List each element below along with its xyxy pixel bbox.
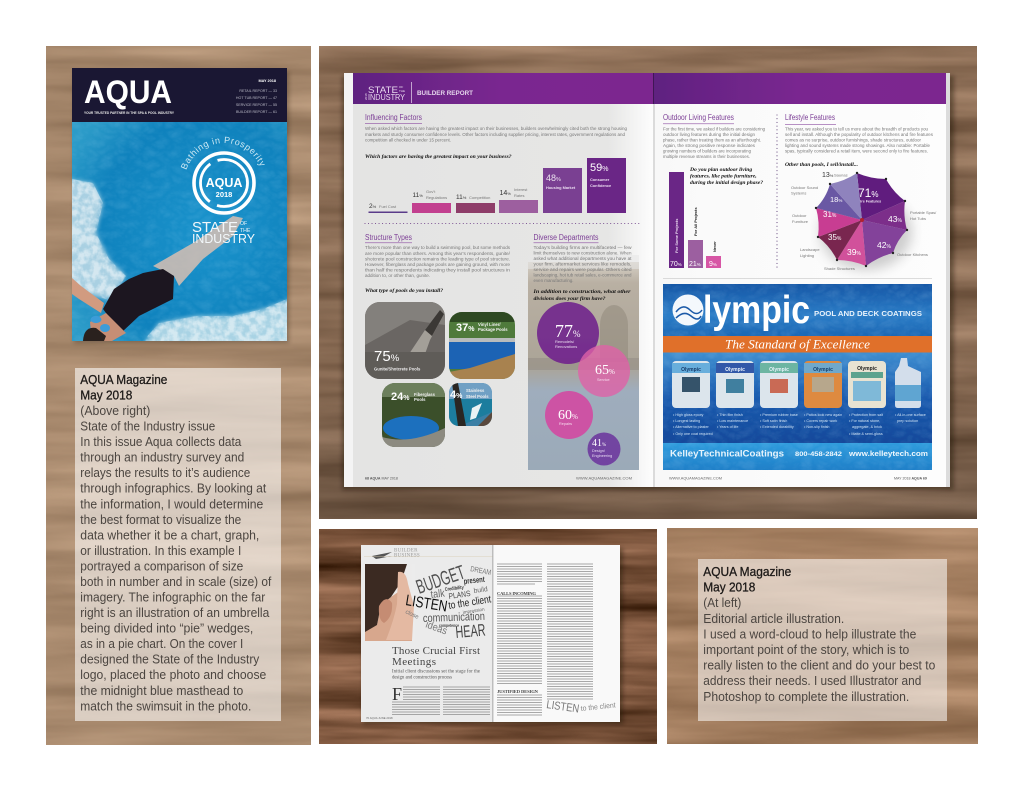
department header: BUSINESS [394, 554, 420, 558]
text box: cover description: or illustration. In this example I [80, 544, 241, 558]
bar: For All Projects 21% [688, 207, 703, 268]
word cloud [404, 562, 492, 642]
photo tile: Fiberglass Pools 24% [382, 383, 445, 447]
article body text [392, 684, 490, 714]
bar: Interest Rates 14% [499, 187, 538, 213]
report header band: STATE [368, 85, 398, 96]
section: Diverse Departments with photo: divisions does your firm have? [534, 296, 606, 302]
text box: editorial description [698, 559, 947, 721]
wedge: Outdoor Sound Systems 18%: Systems [791, 190, 806, 196]
article body columns [497, 564, 593, 715]
word cloud: ideas [424, 619, 449, 637]
bar: For Some Projects 70%: 70% [670, 261, 682, 268]
text box: cover description [75, 368, 281, 721]
word cloud: build [473, 586, 488, 595]
text box: cover description: portrayed a comparison of size [80, 559, 243, 573]
text box: editorial description: really listen to the client and do your best to [703, 659, 935, 673]
bar: For Some Projects 70% [669, 172, 684, 268]
text box: cover description: data whether it be a chart, graph, [80, 528, 259, 542]
bar: Consumer Confidence 59%: Consumer [590, 177, 610, 182]
can 1: Deckoat: • Only one coat required [673, 432, 713, 436]
article body columns: CALLS INCOMING [497, 591, 536, 596]
can 5: Masonry Sealer: • Matte & semi-gloss [849, 432, 883, 436]
section: Diverse Departments with photo: even manufacturing. [534, 278, 574, 283]
text box: editorial description: Editorial article illustration. [703, 612, 844, 626]
section: Diverse Departments with photo: landscaping, hot tub retail sales, e-commerce and [534, 272, 632, 278]
advertiser contact line: KelleyTechnicalCoatings [670, 448, 784, 460]
photo tile: Vinyl Liner/Package Pools 37%: Vinyl Liner/ [478, 322, 501, 327]
panel: Builder Report magazine spread on wood [319, 46, 977, 519]
can 4: Patio Stone: • Covers repair work [804, 419, 837, 423]
section: Lifestyle Features: Other than pools, I sell/install... [785, 162, 858, 168]
wedge: Portable Spas/Hot Tubs 43%: Portable Spas/ [910, 210, 937, 215]
cover masthead: RETAIL REPORT — 33 [239, 89, 277, 93]
wedge: Shade Structures 39% [824, 220, 866, 271]
section: Influencing Factors [365, 112, 628, 160]
can 5: Masonry Sealer: • For natural stone, [849, 419, 880, 423]
article left page: 70 AQUA JUNE 2018 [366, 716, 393, 720]
can 4: Patio Stone: • Patios look new again [804, 413, 842, 417]
section: Diverse Departments with photo [528, 232, 639, 470]
can 4: Patio Stone: Olympic [813, 367, 833, 373]
section: Diverse Departments with photo: Today’s building firms are multifaceted — few [534, 245, 633, 250]
photo tile: Gunite/Shotcrete Pools 75% [365, 302, 445, 379]
orange tagline band [663, 336, 932, 352]
bubble: Design/Engineering 41% [588, 432, 620, 466]
text box: cover description: the midnight blue masthead to [80, 684, 243, 698]
section: Influencing Factors: When asked which factors are having the greatest impact on their businesses, builders overwhelmingly cited both the strong housing [365, 126, 628, 131]
report header band: THE [399, 89, 405, 93]
can 1: Deckoat: Olympic [681, 367, 701, 373]
bar: Housing Market 48% [543, 168, 582, 213]
can 4: Patio Stone: • Non-slip finish [804, 425, 829, 429]
word cloud: talk [430, 588, 446, 601]
photo tile: Stainless Steel Pools 4%: Steel Pools [466, 394, 489, 399]
wedge: Fire Features 71%: 71% [858, 186, 878, 200]
section: Diverse Departments with photo: In addition to construction, what other [532, 289, 631, 295]
photo tile: Stainless Steel Pools 4%: 4% [450, 389, 463, 401]
bubble: Service 65%: Service [597, 378, 610, 382]
State of the Industry logo: 2018 [216, 190, 232, 199]
bar chart: influencing factors [368, 158, 626, 213]
section: Outdoor Living Features: Outdoor Living Features [663, 112, 734, 122]
pull text: LISTEN to the client [546, 699, 617, 716]
bar: Competition 11% [456, 194, 495, 213]
bottle: surface prep: • All-in-one surface [895, 413, 926, 417]
text box: editorial description: important point of the story, which is to [703, 643, 909, 657]
article title: Initial client discussions set the stage for the [392, 670, 480, 674]
Olympic logo: lympic [703, 289, 810, 332]
left page footer: WWW.AQUAMAGAZINE.COM [576, 476, 632, 480]
photo tile: Stainless Steel Pools 4% [449, 383, 492, 426]
text box: cover description: the best format to visualize the [80, 513, 241, 527]
right magazine page [653, 73, 950, 487]
section: Outdoor Living Features: Do you plan outdoor living [689, 167, 752, 173]
word cloud: PLANS [448, 589, 471, 601]
article title: design and construction process [392, 676, 452, 680]
text box: cover description: (Above right) [80, 404, 150, 418]
wedge: Saunas 13%: 13% [822, 172, 834, 179]
Olympic logo: POOL AND DECK COATINGS [814, 311, 922, 318]
section: Lifestyle Features: Lifestyle Features [785, 112, 835, 122]
section: Outdoor Living Features: For the first time, we asked if builders are considering [663, 126, 766, 132]
cover masthead: AQUA [84, 74, 172, 110]
wedge: Shade Structures 39%: Shade Structures [824, 266, 855, 271]
photo tile: Vinyl Liner/Package Pools 37% [449, 312, 515, 379]
report header band: OF [399, 85, 403, 89]
word cloud: communication [423, 611, 485, 625]
article title: Those Crucial First [392, 645, 480, 657]
section: Structure Types: are more popular than others. Among this year’s respondents, gunite/ [365, 251, 511, 256]
can 5: Masonry Sealer: Olympic [857, 366, 877, 372]
article title: Meetings [392, 656, 436, 668]
bar: Never 9%: Never [712, 241, 717, 252]
section: Lifestyle Features: comes as no surprise, outdoor furnishings, shade structures, outdoor [785, 138, 922, 142]
panel: editorial description on wood [667, 528, 978, 744]
bottle: surface prep: prep solution [897, 419, 918, 423]
cover masthead: SERVICE REPORT — 55 [236, 103, 277, 107]
section: Outdoor Living Features: during the initial design phase? [690, 180, 763, 186]
wedge: Saunas 13% [822, 172, 862, 220]
wedge: Portable Spas/Hot Tubs 43%: Hot Tubs [910, 216, 926, 221]
can 1: Deckoat: • Longest lasting [673, 419, 700, 423]
bar: Fuel Cost 2%: Fuel Cost [379, 204, 397, 209]
bar: Competition 11%: 11% [456, 194, 467, 201]
panel: cover and description on wood [46, 46, 311, 745]
article body columns: JUSTIFIED DESIGN [497, 689, 539, 694]
right page footer: MAY 2018 AQUA 69 [894, 476, 927, 480]
article body text: F [392, 684, 402, 704]
bar: Interest Rates 14%: 14% [500, 190, 511, 197]
wedge: Landscape Lighting 35%: 35% [828, 233, 842, 242]
text box: cover description: AQUA Magazine [80, 373, 167, 387]
department header [364, 548, 493, 559]
cover masthead [72, 68, 287, 122]
bar: For All Projects 21%: For All Projects [693, 207, 698, 236]
cover photo: swimmer in pool [68, 122, 291, 345]
section: Diverse Departments with photo: your firm, aftermarket services like remodels, [534, 262, 632, 266]
can 3: Poxolon 2: • Soft satin finish [760, 419, 787, 423]
word cloud: close [404, 609, 420, 621]
State of the Industry logo: Bathing in Prosperity [180, 136, 265, 170]
section: Outdoor Living Features: outdoor living features during the initial design [663, 132, 756, 137]
bar: Housing Market 48%: Housing Market [546, 185, 576, 190]
orange tagline band: The Standard of Excellence [725, 338, 870, 352]
can 2: Poxolon 1 [716, 361, 754, 429]
word cloud: Credibility [445, 585, 464, 593]
wedge: Outdoor Furniture 31%: Outdoor [792, 213, 807, 218]
section: Structure Types [365, 232, 511, 294]
photo tile: Gunite/Shotcrete Pools 75%: 75% [374, 348, 400, 365]
section: Influencing Factors: markets and sturdy consumer confidence levels. Other factors including supplier pricing, interest rates, government regulations and [365, 132, 626, 137]
section: Influencing Factors: Which factors are having the greatest impact on your business? [365, 154, 512, 160]
left page footer: 68 AQUA MAY 2018 [365, 476, 398, 480]
report header band: 2018 [364, 93, 368, 100]
wedge: Outdoor Kitchens 42%: 42% [877, 240, 891, 250]
section: Lifestyle Features: lighting and sound systems made strong showings. Also notable: Portable [785, 143, 931, 148]
bar: For Some Projects 70%: For Some Projects [674, 219, 679, 253]
word cloud: BUDGET [413, 562, 468, 599]
can 3: Poxolon 2: • Extended durability [760, 425, 794, 429]
cover masthead: BUILDER REPORT — 61 [236, 110, 277, 114]
can 2: Poxolon 1: Olympic [725, 367, 745, 373]
text box: cover description: being divided into “pie” wedges, [80, 622, 253, 636]
text box: cover description: relays the results to it’s audience [80, 466, 250, 480]
department header: BUILDER [394, 548, 418, 554]
section: Diverse Departments with photo: limit themselves to new construction alone. When [534, 250, 632, 256]
photo: ear and cupped hand [365, 564, 415, 641]
advertiser contact line: 800-458-2842 [795, 451, 842, 458]
section: Influencing Factors: Influencing Factors [365, 112, 422, 122]
bar: Never 9% [706, 241, 721, 268]
State of the Industry logo: STATE [192, 219, 238, 236]
advertiser contact line [670, 448, 928, 460]
report header band [353, 73, 653, 104]
bubble: Remodels/Renovations 77%: Renovations [555, 344, 577, 349]
report header band: BUILDER REPORT [417, 90, 473, 97]
left magazine page [344, 73, 653, 487]
Olympic logo [672, 289, 922, 332]
photo tile: Vinyl Liner/Package Pools 37%: 37% [456, 322, 475, 334]
text box: cover description: the information, I would determine [80, 497, 263, 511]
word cloud: DREAM [470, 564, 492, 577]
State of the Industry logo: OF [240, 221, 247, 227]
word cloud: impression [462, 607, 485, 616]
can 3: Poxolon 2 [760, 361, 798, 429]
article right page [492, 545, 620, 722]
can 3: Poxolon 2: • Premium rubber base [760, 413, 798, 417]
section: Structure Types: addition to, or other than, gunite. [365, 273, 430, 278]
photo tile: Stainless Steel Pools 4%: Stainless [466, 388, 485, 393]
can 1: Deckoat [672, 361, 713, 436]
right page footer [669, 476, 927, 480]
section: Structure Types: There’s more than one way to build a swimming pool, but some methods [365, 245, 510, 250]
section: Structure Types: However, fiberglass and package pools are gaining ground, with more [365, 262, 511, 267]
section: Structure Types: Structure Types [365, 232, 412, 242]
can 1: Deckoat: • Alternative to plaster [673, 425, 709, 429]
bar: Consumer Confidence 59%: 59% [590, 162, 608, 174]
section: Diverse Departments with photo: service and repairs were popular. Others cited [534, 267, 632, 272]
section: Outdoor Living Features: Again, the strong positive response indicates [663, 143, 755, 148]
wedge: Portable Spas/Hot Tubs 43% [862, 201, 937, 230]
bar: Gov't Regulations 11%: Regulations [426, 195, 447, 200]
text box: cover description: through an industry survey and [80, 451, 244, 465]
section: Structure Types: than half the respondents indicating they install pool structures in [365, 268, 511, 272]
text box: cover description: In this issue Aqua collects data [80, 435, 241, 449]
wedge: Outdoor Sound Systems 18% [791, 184, 862, 220]
bar: Fuel Cost 2%: 2% [369, 203, 377, 210]
product cans and feature lists [672, 358, 926, 436]
bubble: Service 65%: 65% [595, 363, 615, 378]
pull text: LISTEN to the client: to the client [580, 700, 617, 713]
bubble: Design/Engineering 41%: Design/ [592, 449, 606, 453]
can 3: Poxolon 2: Olympic [769, 367, 789, 373]
text box: cover description: match the swimsuit in the photo. [80, 699, 251, 713]
bar: Never 9%: 9% [709, 261, 717, 268]
photo tile: Gunite/Shotcrete Pools 75%: Gunite/Shotcrete Pools [374, 366, 421, 372]
bubble: Repairs 60%: 60% [558, 408, 578, 423]
article title [392, 645, 480, 680]
wedge: Outdoor Furniture 31% [792, 208, 862, 237]
cover masthead: HOT TUB REPORT — 47 [236, 96, 277, 100]
section: Outdoor Living Features: phase, rather than treating them as an afterthought. [663, 138, 761, 142]
can 5: Masonry Sealer [848, 361, 886, 436]
photo tile: Fiberglass Pools 24%: Fiberglass [414, 392, 436, 397]
word cloud: HEAR [455, 620, 486, 642]
text box: cover description: right is an illustration of an umbrella [80, 606, 269, 620]
advertisement: Olympic Pool and Deck Coatings [663, 284, 932, 470]
wedge: Outdoor Sound Systems 18%: 18% [830, 195, 842, 204]
wedge: Landscape Lighting 35% [800, 220, 862, 260]
bottle: surface prep [895, 358, 926, 423]
section: Influencing Factors: competition all checked in under 15 percent. [365, 138, 451, 142]
bubble: Design/Engineering 41%: Engineering [592, 454, 612, 458]
bar: For All Projects 21%: 21% [689, 261, 701, 268]
panel: editorial article spread on wood [319, 529, 657, 744]
text box: cover description: State of the Industry issue [80, 420, 215, 434]
section: Outdoor Living Features: features, like patio furniture, [690, 174, 757, 180]
State of the Industry logo: THE [240, 228, 251, 234]
header band [653, 73, 946, 104]
section: Outdoor Living Features [663, 112, 766, 186]
bubble: Design/Engineering 41%: 41% [592, 438, 606, 449]
text box: editorial description: (At left) [703, 596, 741, 610]
wedge: Outdoor Sound Systems 18%: Outdoor Sound [791, 185, 818, 190]
wedge: Outdoor Kitchens 42%: Outdoor Kitchens [897, 252, 928, 257]
wedge: Portable Spas/Hot Tubs 43%: 43% [888, 214, 902, 224]
left page footer [365, 476, 632, 480]
section: Lifestyle Features: spas, typically considered a retail item, were second only to fire features. [785, 148, 928, 154]
wedge: Shade Structures 39%: 39% [847, 247, 861, 257]
can 1: Deckoat: • High gloss epoxy [673, 413, 704, 417]
word cloud: LISTEN [404, 592, 449, 616]
text box: editorial description: I used a word-cloud to help illustrate the [703, 627, 916, 641]
section: Structure Types: What type of pools do you install? [365, 288, 443, 294]
cover masthead: YOUR TRUSTED PARTNER IN THE SPA & POOL INDUSTRY [84, 111, 174, 115]
text box: cover description: as in a pie chart. On the cover I [80, 637, 243, 651]
wedge: Fire Features 71% [857, 173, 905, 220]
umbrella pie chart: lifestyle features [791, 172, 937, 271]
bar: Gov't Regulations 11%: Gov’t [426, 189, 436, 194]
bar: Consumer Confidence 59% [587, 158, 626, 213]
article left page [361, 545, 493, 722]
wedge: Outdoor Furniture 31%: Furniture [792, 219, 809, 224]
section: Lifestyle Features [785, 112, 933, 168]
bubble: Remodels/Renovations 77% [537, 302, 599, 364]
can 2: Poxolon 1: • Years of life [717, 425, 738, 429]
can 5: Masonry Sealer: • Protection from salt [849, 413, 883, 417]
word cloud: competence [439, 623, 459, 628]
section: Outdoor Living Features: growing numbers of builders are incorporating [663, 148, 752, 154]
bar: Gov't Regulations 11% [412, 189, 451, 213]
section: Lifestyle Features: sell and install. Although the popularity of outdoor kitchens and fire features [785, 132, 933, 137]
section: Diverse Departments with photo: Diverse Departments [534, 232, 598, 242]
text box: cover description: logo, placed the photo and choose [80, 668, 266, 682]
text box: editorial description: AQUA Magazine [703, 565, 791, 579]
word cloud: to the client [448, 593, 492, 612]
bar: Interest Rates 14%: Interest [514, 187, 528, 192]
text box: editorial description: Photoshop to complete the illustration. [703, 690, 909, 704]
can 5: Masonry Sealer: aggregate, & brick [852, 425, 882, 429]
bubble: Repairs 60%: Repairs [559, 422, 572, 426]
text box: cover description: both in number and in scale (size) of [80, 575, 272, 589]
text box: cover description: through infographics. By looking at [80, 482, 267, 496]
pull text: LISTEN to the client: LISTEN [546, 699, 580, 716]
State of the Industry logo [180, 136, 265, 246]
wedge: Saunas 13%: Saunas [834, 172, 848, 178]
photo tile: Fiberglass Pools 24%: 24% [391, 391, 410, 403]
bar: Interest Rates 14%: Rates [514, 193, 524, 198]
text box: cover description: May 2018 [80, 388, 132, 402]
text box: cover description: designed the State of the Industry [80, 653, 260, 667]
State of the Industry logo: AQUA [206, 176, 242, 190]
bar: Housing Market 48%: 48% [546, 173, 561, 183]
bubble: Service 65% [578, 345, 630, 397]
bar chart: outdoor living [669, 172, 721, 268]
wedge: Outdoor Kitchens 42% [862, 220, 928, 266]
bar: Consumer Confidence 59%: Confidence [590, 183, 612, 188]
can 4: Patio Stone [804, 361, 842, 429]
section: Lifestyle Features: This year, we asked you to tell us more about the breadth of products you [785, 126, 929, 132]
section: Structure Types: shotcrete pool construction remains the leading type of pool structure. [365, 256, 510, 262]
cover masthead: MAY 2018 [258, 79, 276, 83]
section: Diverse Departments with photo: asked what additional departments you have at [534, 256, 632, 261]
State of the Industry logo: INDUSTRY [192, 231, 255, 246]
bar: Gov't Regulations 11%: 11% [412, 192, 423, 199]
report header band: INDUSTRY [368, 92, 405, 102]
can 2: Poxolon 1: • Thin film finish [717, 413, 743, 417]
bar: Fuel Cost 2% [368, 203, 408, 213]
section: Outdoor Living Features: multiple revenue streams in their businesses. [663, 154, 750, 159]
wedge: Fire Features 71%: Fire Features [858, 200, 881, 204]
text box: editorial description: May 2018 [703, 581, 755, 595]
wedge: Outdoor Furniture 31%: 31% [823, 210, 837, 219]
photo tile: Fiberglass Pools 24%: Pools [414, 397, 426, 402]
text box: editorial description: address their needs. I used Illustrator and [703, 674, 921, 688]
word cloud: present [463, 575, 485, 586]
photo tile: Vinyl Liner/Package Pools 37%: Package Pools [478, 327, 508, 332]
text box: cover description: imagery. The infographic on the far [80, 590, 265, 604]
bubble: Remodels/Renovations 77%: 77% [555, 321, 581, 341]
right page footer: WWW.AQUAMAGAZINE.COM [669, 476, 722, 480]
bubble: Repairs 60% [545, 391, 593, 439]
wedge: Landscape Lighting 35%: Lighting [800, 253, 814, 258]
can 2: Poxolon 1: • Low maintenance [717, 419, 748, 423]
magazine cover [72, 68, 287, 341]
bar: Competition 11%: Competition [469, 195, 490, 200]
bubble: Remodels/Renovations 77%: Remodels/ [555, 339, 575, 344]
advertiser contact line: www.kelleytech.com [848, 451, 928, 458]
wedge: Landscape Lighting 35%: Landscape [800, 247, 820, 252]
